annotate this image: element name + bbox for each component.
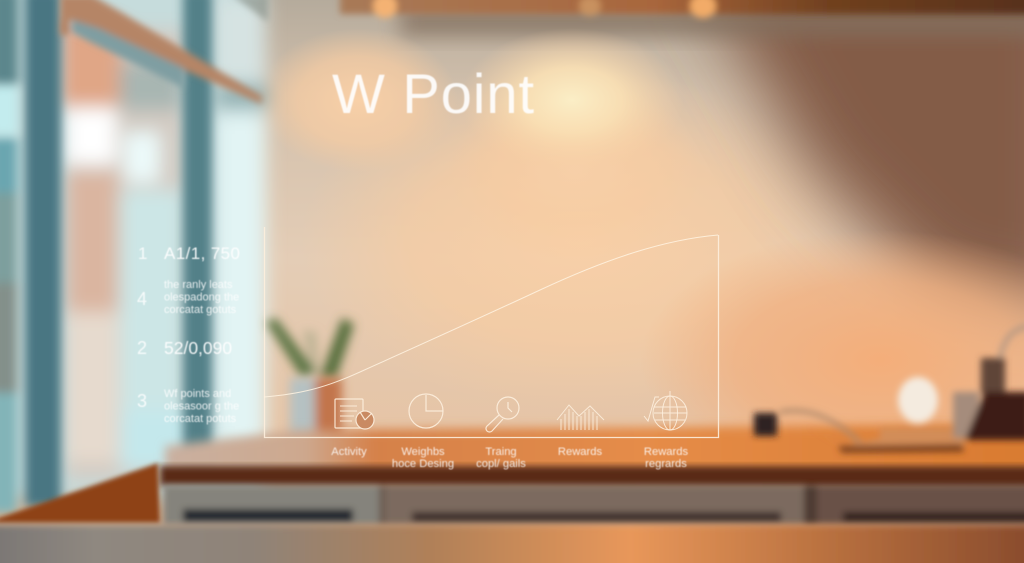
line chart [264, 227, 718, 438]
stat row 4 description: olespadong the [164, 292, 239, 304]
counter [165, 424, 1024, 472]
icon: pie chart [409, 394, 443, 428]
window frames [0, 0, 212, 513]
label: training: copl/ gails [476, 458, 526, 470]
counter front edge [160, 466, 1024, 488]
icon: rewards bars [557, 405, 604, 430]
label: rewards regards: regrards [645, 458, 687, 470]
plant pot [290, 378, 342, 444]
label: training: Traing [485, 446, 517, 458]
icon: globe with check [644, 391, 687, 430]
label: rewards regards: Rewards [644, 446, 688, 458]
left stats panel [137, 244, 240, 425]
foreground table [0, 525, 1024, 563]
wall [250, 0, 1024, 470]
stat row 3 description: olesasoor g the [164, 400, 239, 412]
stat row 4 description: the ranly leats [164, 279, 233, 291]
left table wedge [0, 463, 160, 523]
cabinets [163, 485, 1024, 525]
stat row 4 description [137, 279, 239, 316]
stat row 4 description: corcatat gotuts [164, 304, 237, 316]
stat row 3 description: 3 [137, 391, 147, 411]
axis labels [331, 446, 688, 470]
growth curve [264, 235, 718, 397]
ceiling band [340, 0, 1024, 18]
window [0, 0, 266, 500]
stat row 1: 1 [138, 244, 147, 263]
right desk objects [754, 326, 1024, 453]
stat row 3 description: Wf points and [164, 388, 231, 400]
icon: magnifier [486, 397, 519, 432]
stat row 3 description: corcatat potuts [164, 413, 237, 425]
label: weights: Weighbs [401, 446, 445, 458]
stat row 2: 2 [137, 338, 147, 358]
label: weights: hoce Desing [392, 458, 454, 470]
stat row 1: A1/1, 750 [164, 244, 240, 263]
label: activity: Activity [331, 446, 367, 458]
stat row 3 description [137, 388, 239, 425]
stat row 4 description: 4 [137, 289, 147, 309]
icon: activity document and pie [335, 399, 374, 429]
chart frame [264, 227, 718, 438]
window transom [60, 0, 268, 104]
label: rewards: Rewards [558, 446, 602, 458]
title: W Point [332, 62, 535, 125]
stat row 2: 52/0,090 [164, 338, 232, 358]
plant [266, 318, 354, 378]
